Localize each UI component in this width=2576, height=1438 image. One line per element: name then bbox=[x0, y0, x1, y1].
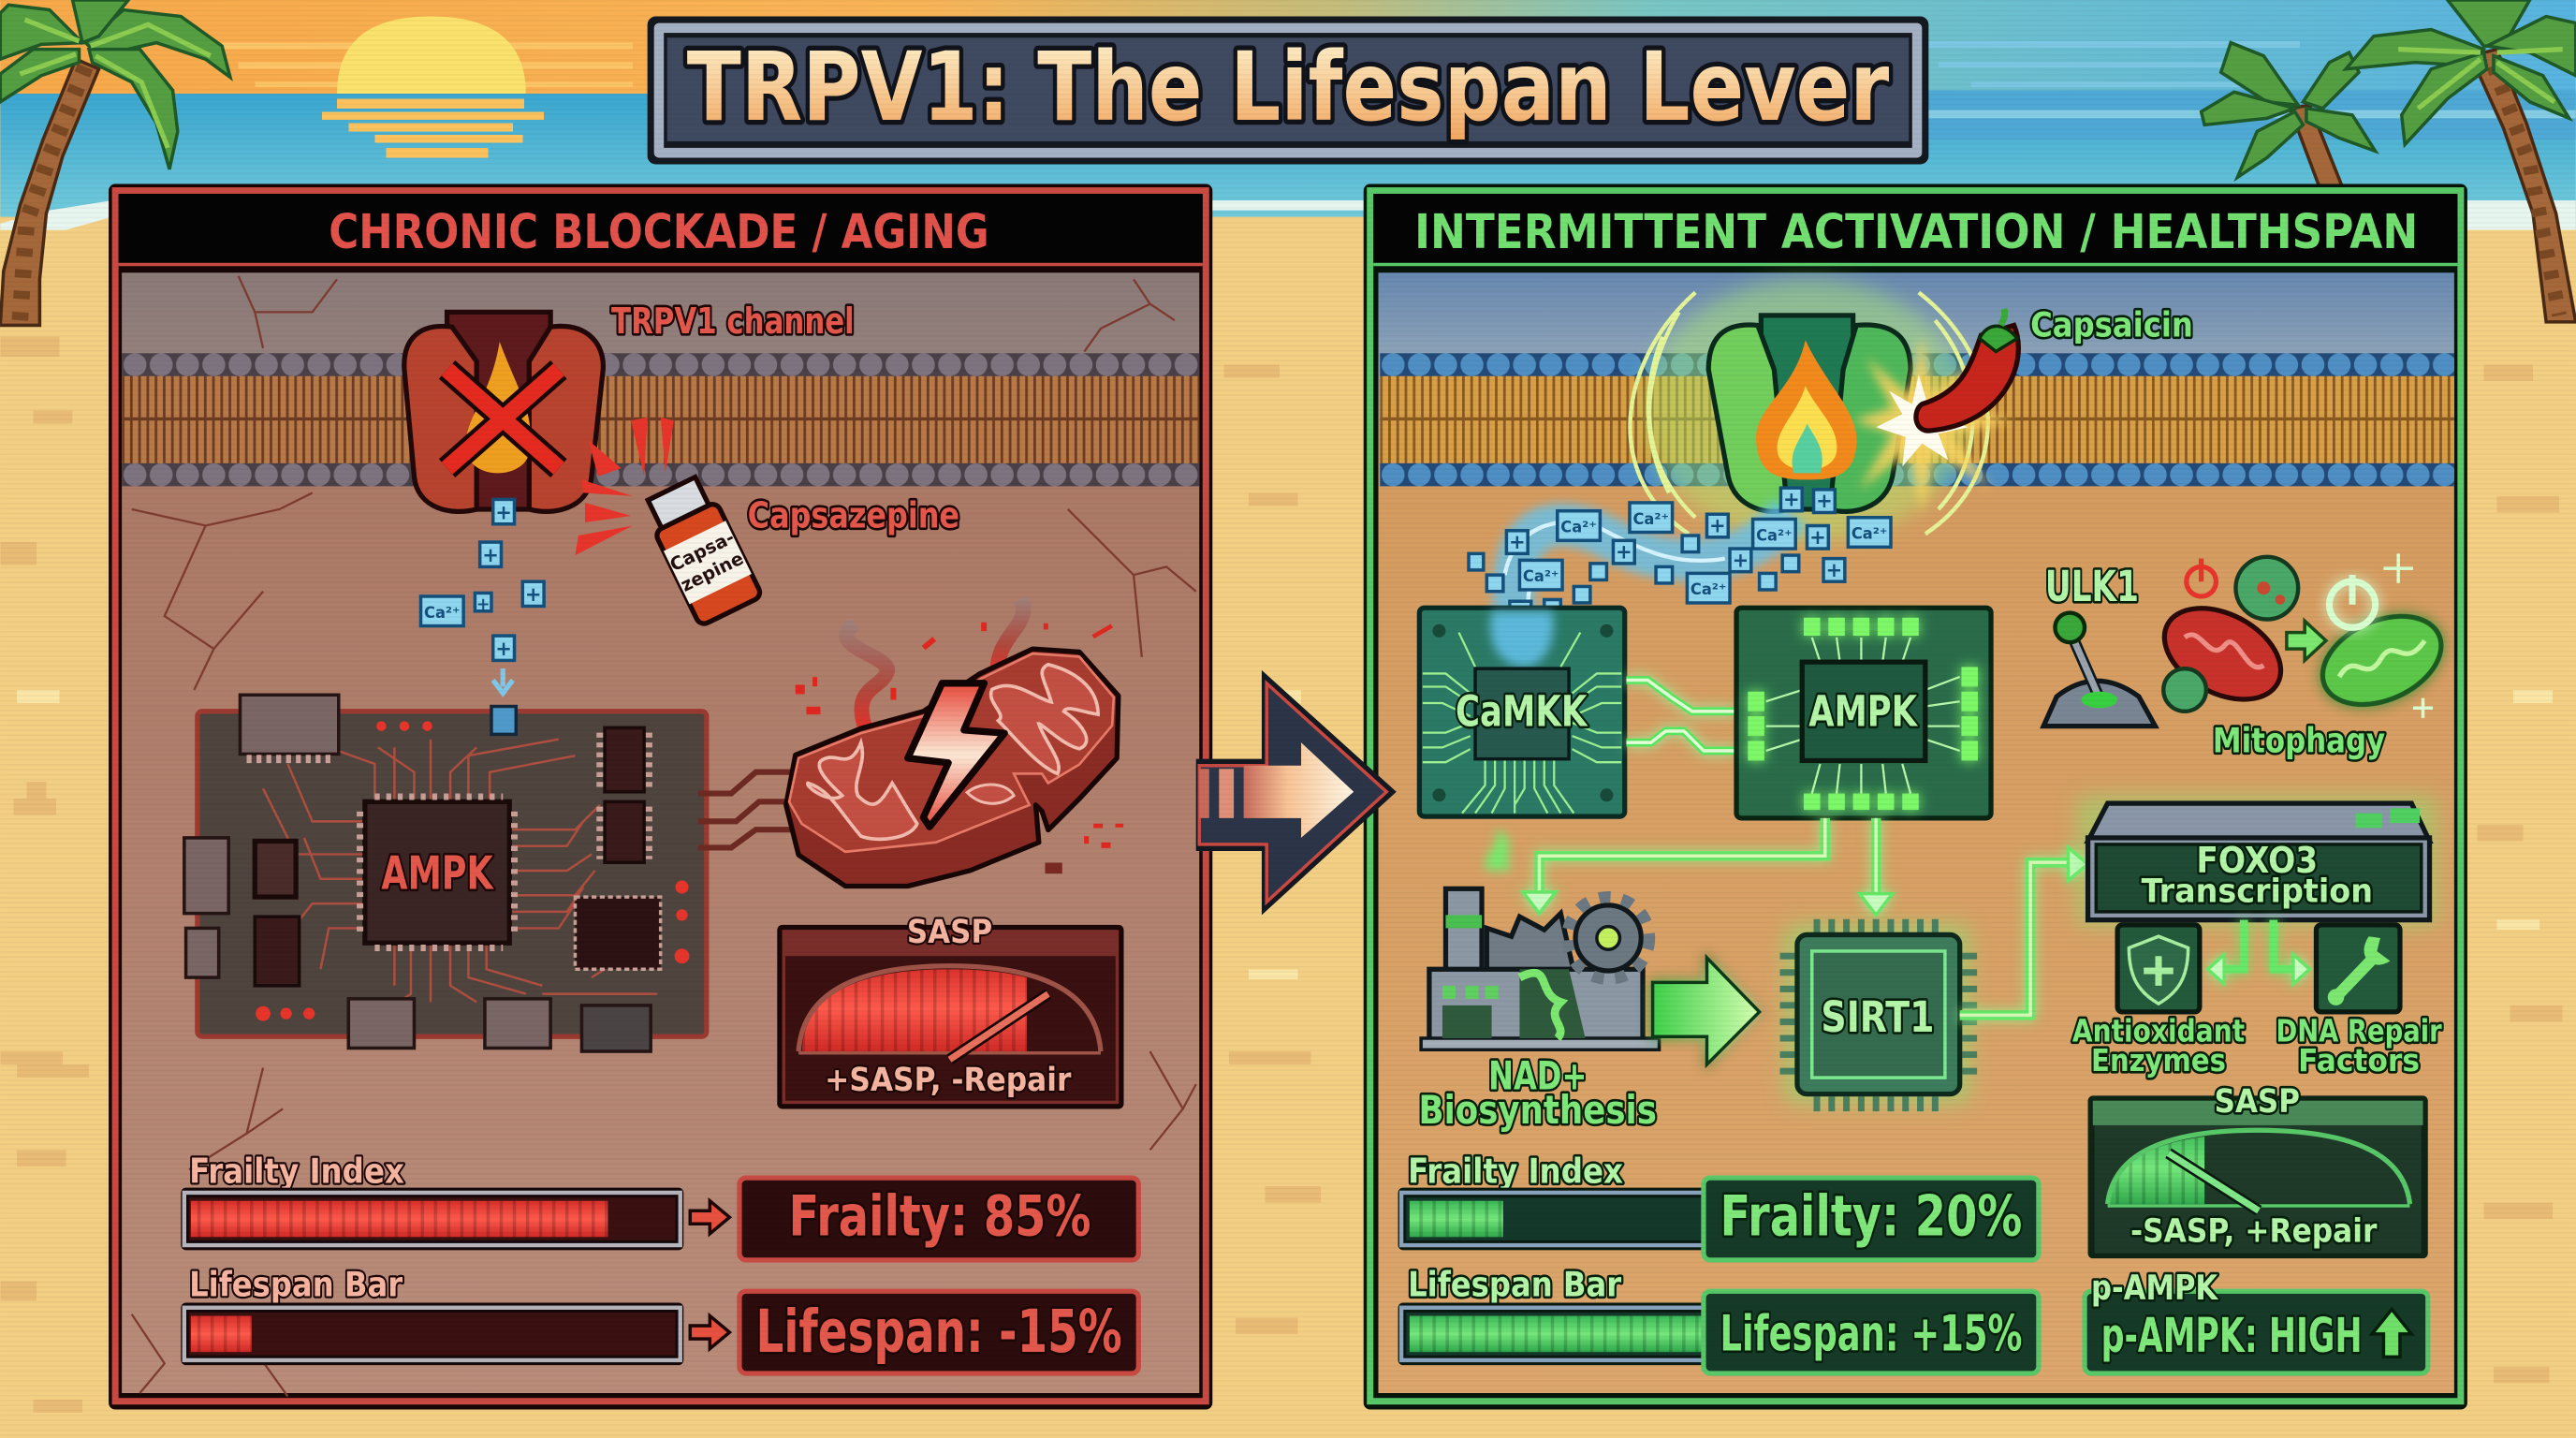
chip: SIRT1: SIRT1 bbox=[1821, 992, 1934, 1042]
icon: open TRPV1 channel with glow bbox=[1631, 279, 1988, 542]
calcium ions trickle: + bbox=[476, 595, 490, 614]
gauge title: SASP bbox=[907, 913, 992, 951]
device: FOXO3 transcription bbox=[2076, 795, 2437, 927]
calcium ions trickle: Ca²⁺ bbox=[424, 604, 461, 622]
arrow: AMPK to SIRT1 bbox=[1860, 818, 1893, 915]
panel header: chronic blockade bbox=[119, 194, 1203, 266]
arrow: lifespan bbox=[690, 1316, 729, 1349]
calcium ion stream: + bbox=[1826, 558, 1842, 581]
chip: AMPK active: AMPK bbox=[1808, 687, 1918, 737]
wires to mitochondrion bbox=[698, 772, 796, 847]
device: FOXO3 transcription: FOXO3 bbox=[2196, 840, 2318, 882]
chip: AMPK: AMPK bbox=[381, 845, 494, 900]
calcium ion stream: Ca²⁺ bbox=[1560, 519, 1597, 536]
label: ULK1: ULK1 bbox=[2045, 562, 2139, 611]
icon: DNA repair wrench bbox=[2316, 925, 2400, 1012]
lifespan bar: aging bbox=[181, 1264, 683, 1365]
calcium ions trickle bbox=[421, 499, 544, 693]
readout: lifespan plus 15 percent bbox=[1704, 1291, 2039, 1373]
chip: SIRT1 bbox=[1784, 923, 1971, 1104]
lifespan bar: healthspan bbox=[1398, 1264, 1719, 1365]
calcium ions trickle: + bbox=[495, 500, 512, 523]
chip: AMPK bbox=[360, 797, 515, 947]
gauge title: SASP bbox=[2215, 1082, 2300, 1121]
icon: capsazepine bottle bbox=[640, 474, 762, 626]
frailty bar: healthspan bbox=[1398, 1151, 1719, 1250]
membrane right bbox=[1380, 353, 2454, 486]
arrow: SIRT1 to FOXO3 bbox=[1960, 847, 2088, 1015]
chip: CaMKK: CaMKK bbox=[1456, 687, 1588, 737]
calcium ion stream bbox=[1469, 487, 1891, 666]
readout: frailty 85 percent bbox=[739, 1178, 1138, 1260]
calcium ion stream: + bbox=[1816, 489, 1833, 512]
calcium ion stream: + bbox=[1616, 540, 1632, 564]
calcium ions trickle: + bbox=[482, 543, 499, 566]
icon: damaged mitochondrion bbox=[786, 599, 1123, 886]
big arrow: NAD+ to SIRT1 bbox=[1653, 958, 1760, 1064]
panel header: intermittent activation: INTERMITTENT ACTIVATION / HEALTHSPAN bbox=[1414, 204, 2418, 259]
arrows: FOXO3 to effectors bbox=[2208, 920, 2309, 984]
icon: ULK1 lever bbox=[2043, 613, 2155, 726]
readout: p-AMPK high: p-AMPK: HIGH bbox=[2101, 1308, 2363, 1363]
label: capsazepine: Capsazepine bbox=[748, 494, 959, 536]
panel: intermittent activation / healthspan bbox=[1364, 184, 2467, 1410]
icon: antioxidant shield bbox=[2117, 925, 2200, 1012]
icon: capsazepine bottle: Capsa- bbox=[666, 526, 738, 576]
readout: frailty 20 percent: Frailty: 20% bbox=[1720, 1185, 2022, 1250]
title text: TRPV1: The Lifespan Lever bbox=[687, 33, 1889, 143]
palm trees right bbox=[2202, 0, 2576, 322]
panel header: chronic blockade: CHRONIC BLOCKADE / AGING bbox=[329, 204, 989, 259]
label: DNA repair factors: DNA Repair bbox=[2276, 1012, 2442, 1049]
calcium ions trickle: + bbox=[495, 637, 512, 660]
arrow: AMPK to NAD+ bbox=[1523, 818, 1825, 914]
readout: p-AMPK high: p-AMPK bbox=[2091, 1268, 2218, 1308]
calcium ion stream: Ca²⁺ bbox=[1632, 510, 1669, 528]
connector: CaMKK to AMPK bbox=[1626, 680, 1734, 751]
label: mitophagy: Mitophagy bbox=[2213, 721, 2385, 761]
readout: lifespan plus 15 percent: Lifespan: +15% bbox=[1720, 1305, 2022, 1362]
label: TRPV1 channel: TRPV1 channel bbox=[611, 301, 855, 343]
icon: up arrow bbox=[2372, 1310, 2411, 1357]
calcium ion stream: + bbox=[1509, 530, 1526, 553]
label: NAD+ Biosynthesis bbox=[1419, 1052, 1657, 1133]
label: capsaicin: Capsaicin bbox=[2030, 305, 2193, 345]
label: antioxidant enzymes bbox=[2072, 1012, 2245, 1078]
calcium ion stream: + bbox=[1709, 514, 1726, 537]
device: FOXO3 transcription: Transcription bbox=[2142, 872, 2373, 910]
icon: capsazepine bottle: zepine bbox=[678, 548, 747, 596]
calcium ion stream: Ca²⁺ bbox=[1523, 567, 1559, 585]
chip: AMPK active bbox=[1736, 608, 1991, 818]
icon: capsaicin spark and chili bbox=[1853, 309, 2018, 512]
calcium ion stream: + bbox=[1809, 525, 1826, 549]
frailty bar: healthspan: Frailty Index bbox=[1408, 1151, 1623, 1191]
icon: blocked TRPV1 channel bbox=[404, 312, 603, 511]
label: NAD+ Biosynthesis: NAD+ bbox=[1488, 1052, 1587, 1098]
board components bbox=[184, 695, 689, 1051]
title banner bbox=[648, 17, 1928, 164]
icon: healthy mitochondrion bbox=[2309, 553, 2455, 722]
connector: AMPK to ULK1 lever bbox=[1991, 682, 2056, 688]
gauge caption: -SASP, +Repair bbox=[2130, 1212, 2378, 1251]
calcium ions trickle: + bbox=[525, 582, 542, 606]
panel header: intermittent activation bbox=[1373, 194, 2457, 266]
calcium ion stream: + bbox=[1733, 548, 1749, 571]
palm tree left bbox=[0, 0, 230, 325]
arrow: frailty bbox=[690, 1201, 729, 1234]
central transition arrow bbox=[1196, 670, 1397, 915]
readout: frailty 20 percent bbox=[1704, 1178, 2039, 1260]
readout: lifespan minus 15 percent bbox=[739, 1291, 1138, 1373]
chip: CaMKK bbox=[1419, 608, 1625, 816]
SASP gauge: elevated bbox=[777, 913, 1124, 1108]
label: DNA repair factors: Factors bbox=[2298, 1042, 2420, 1078]
icon: NAD+ factory bbox=[1421, 829, 1660, 1049]
arrow: mitophagy bbox=[2287, 621, 2326, 660]
circuit board with AMPK chip bbox=[181, 599, 1138, 1373]
frailty bar: aging: Frailty Index bbox=[189, 1151, 404, 1191]
calcium ion stream: + bbox=[1783, 487, 1800, 510]
label: NAD+ Biosynthesis: Biosynthesis bbox=[1419, 1087, 1657, 1133]
icon: red burst marks bbox=[575, 418, 674, 555]
label: DNA repair factors bbox=[2276, 1012, 2442, 1078]
calcium ion stream: Ca²⁺ bbox=[1756, 526, 1793, 544]
readout: p-AMPK high bbox=[2085, 1268, 2428, 1373]
readout: lifespan minus 15 percent: Lifespan: -15% bbox=[755, 1297, 1122, 1366]
membrane left bbox=[122, 353, 1199, 486]
calcium ion stream: Ca²⁺ bbox=[1690, 580, 1727, 598]
sun bbox=[322, 17, 544, 157]
SASP gauge: low bbox=[2088, 1082, 2428, 1258]
calcium ion stream: + bbox=[1512, 601, 1529, 624]
gauge caption: +SASP, -Repair bbox=[825, 1061, 1072, 1099]
lifespan bar: healthspan: Lifespan Bar bbox=[1408, 1264, 1622, 1304]
icon: damaged mitochondrion with vesicles bbox=[2149, 557, 2298, 718]
lifespan bar: aging: Lifespan Bar bbox=[189, 1264, 403, 1304]
label: antioxidant enzymes: Antioxidant bbox=[2072, 1012, 2245, 1049]
frailty bar: aging bbox=[181, 1151, 683, 1250]
calcium ion stream: Ca²⁺ bbox=[1852, 525, 1887, 543]
readout: frailty 85 percent: Frailty: 85% bbox=[789, 1185, 1090, 1250]
label: antioxidant enzymes: Enzymes bbox=[2091, 1042, 2226, 1078]
